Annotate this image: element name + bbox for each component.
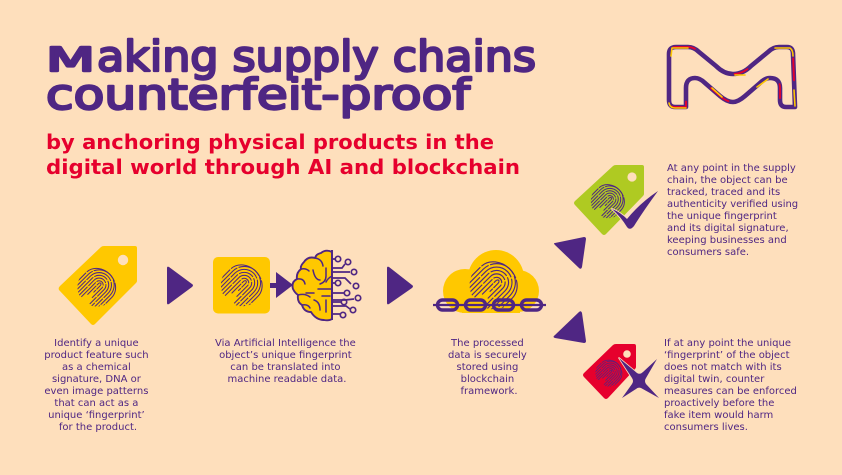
text: verified outcome: keeping businesses and: [667, 235, 787, 246]
text: step 1: as a chemical: [62, 362, 131, 373]
text: mismatch outcome: consumers lives.: [664, 422, 748, 433]
text: step 3: The processed: [450, 338, 524, 349]
text: mismatch outcome: fake item would harm: [664, 410, 773, 421]
icon: yellow fingerprint tag: [59, 246, 137, 325]
text: verified outcome: consumers safe.: [667, 247, 749, 258]
connector arrow: [270, 272, 293, 298]
text: mismatch outcome: proactively before the: [664, 398, 774, 409]
title: aking supply chains: [97, 32, 536, 81]
title: counterfeit-proof: [46, 70, 471, 119]
circuit: [332, 250, 361, 320]
arrow: [387, 267, 413, 304]
text: step 1: that can act as a: [54, 398, 138, 409]
arrow up-right: [554, 237, 586, 269]
text: verified outcome: the unique fingerprint: [667, 211, 777, 222]
text: step 1: signature, DNA or: [52, 374, 142, 385]
text: verified outcome: authenticity verified using: [667, 199, 798, 210]
cross star: [619, 358, 659, 398]
text: verified outcome: At any point in the supply: [667, 163, 796, 174]
text: verified outcome: chain, the object can be: [667, 175, 788, 186]
text: verified outcome: and its digital signature,: [667, 223, 789, 234]
title: [46, 32, 536, 119]
text: step 3: framework.: [460, 386, 518, 397]
icon: cloud with chain: [433, 250, 546, 320]
text: step 3: data is securely: [448, 350, 527, 361]
text: mismatch outcome: does not match with its: [664, 362, 782, 373]
text: step 1: Identify a unique: [54, 338, 139, 349]
arrow down-right: [554, 311, 586, 343]
icon: AI brain: [270, 250, 361, 320]
check mark: [612, 191, 658, 229]
text: step 2: machine readable data.: [228, 374, 346, 385]
text: step 1: even image patterns: [44, 386, 148, 397]
text: mismatch outcome: digital twin, counter: [664, 374, 765, 385]
subtitle: by anchoring physical products in the: [46, 130, 494, 154]
text: step 3: blockchain: [461, 374, 514, 385]
text: verified outcome: tracked, traced and its: [667, 187, 780, 198]
text: step 3: stored using: [456, 362, 518, 373]
text: step 1: unique ‘fingerprint’: [48, 410, 145, 421]
subtitle: digital world through AI and blockchain: [46, 155, 520, 179]
text: step 2: Via Artificial Intelligence the: [215, 338, 356, 349]
text: step 1: for the product.: [59, 422, 137, 433]
logo: [669, 47, 795, 108]
text: mismatch outcome: measures can be enforced: [664, 386, 797, 397]
text: mismatch outcome: If at any point the unique: [664, 338, 791, 349]
title: M: [46, 40, 95, 79]
text: step 1: product feature such: [44, 350, 149, 361]
text: mismatch outcome: ‘fingerprint’ of the object: [664, 350, 790, 361]
icon: fingerprint square: [212, 257, 270, 315]
icon: green tag with check: [574, 165, 658, 235]
text: step 2: can be translated into: [230, 362, 341, 373]
icon: red tag with cross: [583, 344, 659, 399]
chain: [433, 300, 546, 310]
subtitle: [46, 130, 520, 179]
text: step 2: object’s unique fingerprint: [219, 350, 352, 361]
brain: [292, 251, 332, 320]
arrow: [167, 267, 193, 304]
